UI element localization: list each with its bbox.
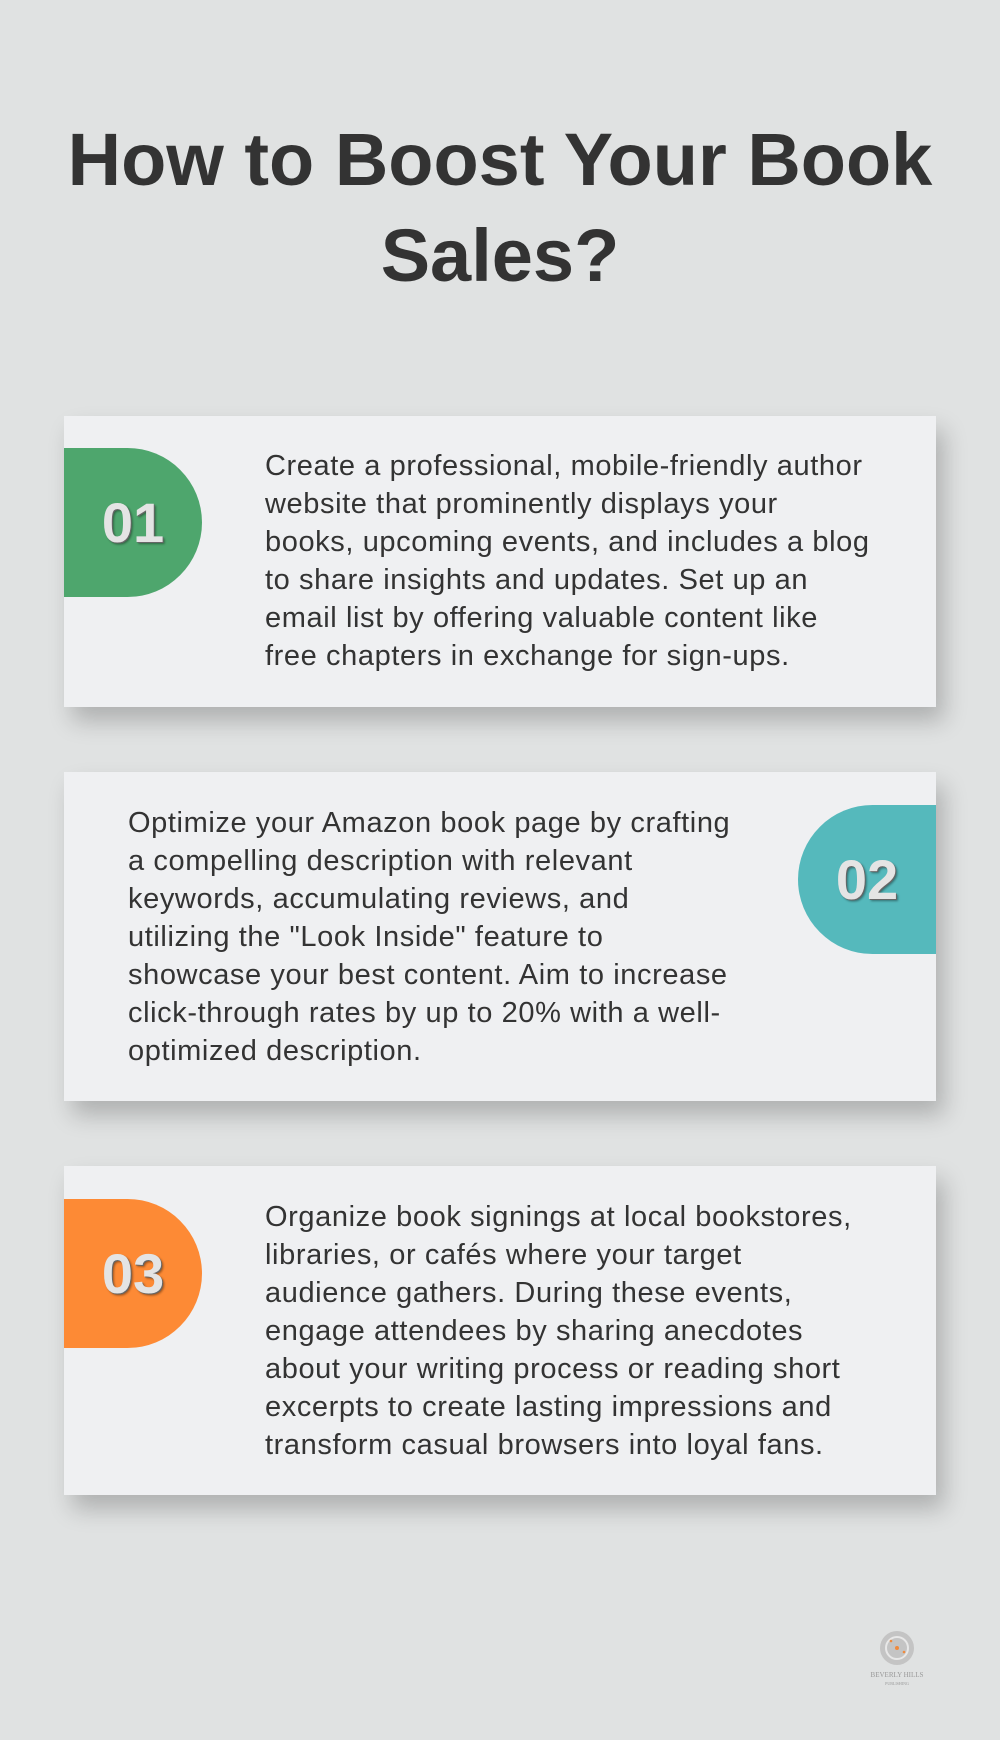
badge 03: 03 bbox=[102, 1242, 164, 1305]
badge 01: 01 bbox=[102, 491, 164, 554]
text block 2: keywords, accumulating reviews, and bbox=[128, 883, 629, 915]
text block 2: utilizing the "Look Inside" feature to bbox=[128, 921, 603, 953]
logo bbox=[870, 1631, 923, 1686]
title: How to Boost Your Book bbox=[68, 118, 932, 201]
text block 3: excerpts to create lasting impressions and bbox=[265, 1391, 832, 1423]
text block 3: engage attendees by sharing anecdotes bbox=[265, 1315, 803, 1347]
text block 3: libraries, or cafés where your target bbox=[265, 1239, 742, 1271]
title bbox=[68, 118, 932, 297]
text block 1 bbox=[265, 450, 870, 672]
logo: PUBLISHING bbox=[885, 1681, 909, 1686]
badge 02 bbox=[798, 805, 936, 954]
text block 3: Organize book signings at local bookstores, bbox=[265, 1201, 852, 1233]
text block 2: optimized description. bbox=[128, 1035, 422, 1067]
text block 1: website that prominently displays your bbox=[265, 488, 778, 520]
text block 3 bbox=[265, 1201, 852, 1461]
text block 3: about your writing process or reading short bbox=[265, 1353, 840, 1385]
panel: step 1 bbox=[64, 416, 936, 707]
panel: step 3 bbox=[64, 1166, 936, 1495]
logo: BEVERLY HILLS bbox=[871, 1671, 923, 1679]
text block 3: audience gathers. During these events, bbox=[265, 1277, 792, 1309]
badge 02: 02 bbox=[836, 848, 898, 911]
text block 2: a compelling description with relevant bbox=[128, 845, 633, 877]
text block 1: Create a professional, mobile-friendly author bbox=[265, 450, 863, 482]
text block 2: click-through rates by up to 20% with a well- bbox=[128, 997, 721, 1029]
badge 01 bbox=[64, 448, 202, 597]
panel: step 2 bbox=[64, 772, 936, 1101]
logo emblem bbox=[880, 1631, 914, 1665]
text block 2: showcase your best content. Aim to increase bbox=[128, 959, 728, 991]
text block 1: to share insights and updates. Set up an bbox=[265, 564, 808, 596]
text block 3: transform casual browsers into loyal fans. bbox=[265, 1429, 824, 1461]
text block 1: email list by offering valuable content like bbox=[265, 602, 818, 634]
text block 1: books, upcoming events, and includes a blog bbox=[265, 526, 870, 558]
text block 2: Optimize your Amazon book page by crafting bbox=[128, 807, 730, 839]
text block 1: free chapters in exchange for sign-ups. bbox=[265, 640, 790, 672]
title: Sales? bbox=[381, 214, 619, 297]
badge 03 bbox=[64, 1199, 202, 1348]
text block 2 bbox=[128, 807, 730, 1067]
